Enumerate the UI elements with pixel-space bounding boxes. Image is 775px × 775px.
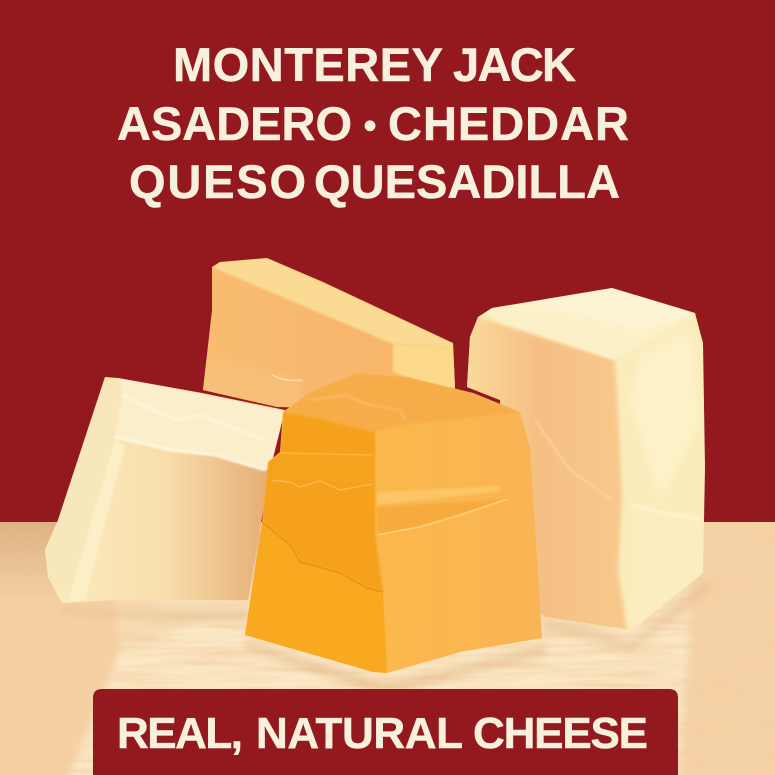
- title line 2: [117, 97, 629, 150]
- cheese: front orange block: [245, 373, 542, 673]
- title line 2: CHEDDAR: [388, 97, 629, 150]
- title line 3: QUESADILLA: [314, 155, 620, 208]
- cheese: right pale block: [460, 288, 705, 640]
- banner text: CHEESE: [473, 709, 648, 758]
- title line 1: JACK: [453, 38, 576, 91]
- cheese: left white wedge: [45, 377, 285, 603]
- cheese: back orange wedge: [200, 258, 456, 410]
- wooden table: [0, 500, 775, 775]
- banner text: [117, 709, 648, 758]
- title: [117, 38, 629, 208]
- title line 3: [129, 155, 620, 208]
- banner: real, natural cheese: [93, 689, 678, 775]
- title line 2: •: [364, 105, 376, 146]
- banner text: NATURAL: [256, 709, 463, 758]
- title line 1: [173, 38, 576, 91]
- title line 2: ASADERO: [117, 97, 352, 150]
- banner text: REAL,: [117, 709, 243, 758]
- title line 3: QUESO: [129, 155, 306, 208]
- title line 1: MONTEREY: [173, 38, 443, 91]
